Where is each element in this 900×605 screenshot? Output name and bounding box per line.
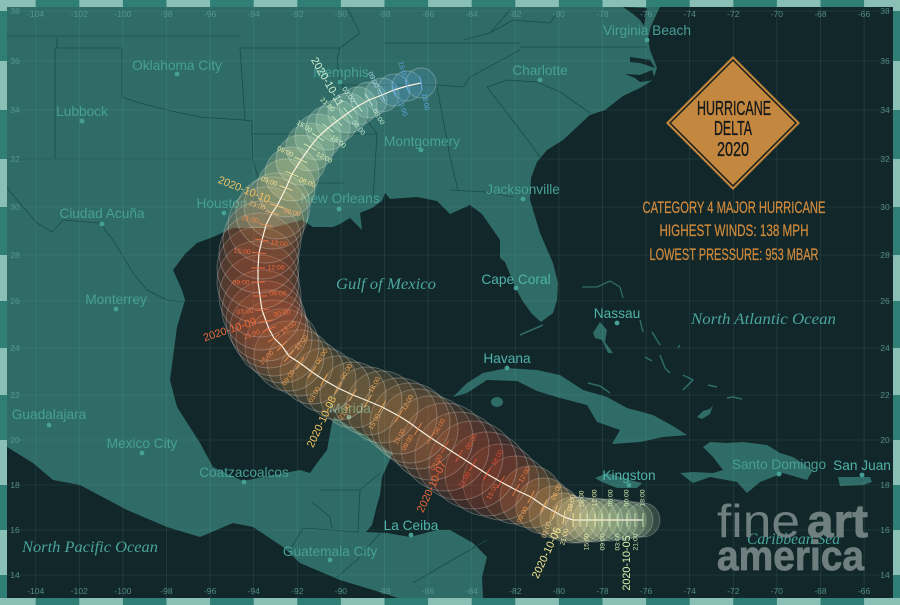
longitude labels top: -94 (248, 9, 260, 19)
longitude labels bottom: -78 (596, 586, 609, 596)
longitude labels top: -96 (204, 9, 217, 19)
ocean label: North Pacific Ocean: North Pacific Ocean (21, 539, 158, 556)
time labels along the track: 18:00 (420, 93, 430, 111)
time labels along the track: 12:00 (267, 264, 285, 272)
hurricane track line (258, 83, 643, 520)
city: Merida: Mérida (329, 401, 371, 416)
warning sign: Hurricane Delta 2020: DELTA (714, 118, 752, 140)
latitude labels right: 36 (880, 56, 890, 66)
date labels along the track (202, 55, 633, 591)
time labels along the track: 00:00 (283, 207, 301, 219)
latitude labels right: 22 (880, 390, 890, 400)
time labels along the track: 09:00 (276, 145, 294, 159)
latitude labels right: 30 (880, 202, 890, 212)
time labels along the track: 00:00 (273, 309, 291, 319)
time labels along the track: 03:00 (260, 176, 278, 188)
land: Jamaica (595, 473, 642, 488)
latitude labels left: 28 (10, 250, 20, 260)
city: Mexico City: Mexico City (107, 436, 178, 451)
longitude labels top: -90 (335, 9, 347, 19)
land: Puerto Rico (838, 477, 872, 486)
city: Kingston: Kingston (602, 468, 656, 483)
time labels along the track: 21:00 (458, 471, 472, 489)
ocean label: Caribbean Sea: Caribbean Sea (747, 531, 840, 548)
city: Memphis: Memphis (313, 65, 369, 80)
time labels along the track: 18:00 (270, 239, 288, 249)
city: Charlotte: Charlotte (512, 63, 568, 78)
longitude labels bottom: -90 (335, 586, 347, 596)
longitude labels bottom: -98 (160, 586, 173, 596)
longitude labels top: -100 (114, 9, 132, 19)
city: Santo Domingo: Santo Domingo (732, 457, 827, 472)
latitude labels left: 26 (10, 296, 20, 306)
time labels along the track: 15:00 (396, 61, 408, 79)
time labels along the track: 06:00 (608, 489, 614, 507)
land: Isle of Youth (491, 397, 503, 407)
date labels along the track: 2020-10-09 (202, 316, 258, 344)
latitude labels left: 30 (10, 202, 20, 212)
city: Oklahoma City: Oklahoma City (132, 58, 222, 73)
date labels along the track: 2020-10-11 (308, 55, 346, 109)
longitude labels top: -86 (422, 9, 435, 19)
state and national borders (7, 7, 647, 583)
time labels along the track: 12:00 (518, 466, 532, 484)
latitude labels right: 14 (880, 570, 890, 580)
time labels along the track: 00:00 (566, 494, 578, 512)
longitude labels top: -82 (509, 9, 522, 19)
city: Cape Coral: Cape Coral (481, 272, 551, 287)
time labels along the track: 15:00 (368, 413, 382, 431)
time labels along the track: 18:00 (329, 134, 347, 150)
longitude labels bottom: -104 (27, 586, 44, 596)
latitude labels left: 14 (10, 570, 20, 580)
longitude labels bottom: -74 (684, 586, 696, 596)
time labels along the track: 06:00 (433, 418, 447, 436)
longitude labels top: -80 (553, 9, 565, 19)
watermark: america (717, 532, 865, 579)
longitude labels top (27, 9, 871, 19)
time labels along the track: 06:00 (269, 290, 287, 298)
latitude labels right: 18 (880, 480, 890, 490)
latitude labels left: 20 (10, 435, 20, 445)
time labels along the track: 09:00 (281, 369, 297, 387)
time labels along the track: 00:00 (624, 489, 630, 507)
storm statistics (642, 198, 826, 264)
longitude labels top: -84 (466, 9, 478, 19)
longitude labels top: -102 (71, 9, 88, 19)
time labels along the track: 12:00 (396, 99, 408, 117)
longitude labels top: -88 (378, 9, 391, 19)
time labels along the track: 21:00 (243, 329, 261, 341)
longitude labels top: -66 (858, 9, 871, 19)
longitude labels bottom: -94 (248, 586, 260, 596)
longitude labels top: -76 (640, 9, 653, 19)
longitude labels top: -92 (291, 9, 304, 19)
latitude labels right: 16 (880, 525, 890, 535)
city: Houston: Houston (197, 196, 247, 211)
latitude labels left: 16 (10, 525, 20, 535)
date labels along the track: 2020-10-06 (530, 525, 564, 581)
longitude labels bottom: -84 (466, 586, 478, 596)
time labels along the track: 09:00 (516, 506, 530, 524)
longitude labels bottom: -102 (71, 586, 88, 596)
time labels along the track: 12:00 (401, 394, 415, 412)
bays (623, 7, 655, 82)
longitude labels bottom: -72 (727, 586, 740, 596)
longitude labels bottom: -100 (114, 586, 132, 596)
ocean label: Gulf of Mexico: Gulf of Mexico (336, 276, 436, 293)
time labels along the track: 06:00 (550, 483, 564, 501)
latitude labels left: 22 (10, 390, 20, 400)
latitude labels left (10, 6, 20, 580)
time labels along the track: 15:00 (486, 483, 500, 501)
longitude labels bottom: -80 (553, 586, 565, 596)
latitude labels right: 32 (880, 154, 890, 164)
city: Guatemala City: Guatemala City (283, 544, 377, 559)
city: Jacksonville: Jacksonville (486, 182, 560, 197)
latitude labels left: 24 (10, 343, 20, 353)
longitude labels bottom: -70 (771, 586, 783, 596)
city: Monterrey: Monterrey (85, 292, 147, 307)
watermark (717, 495, 868, 579)
3-hour tick marks (251, 76, 643, 527)
latitude labels right: 34 (880, 105, 890, 115)
latitude labels left: 38 (10, 6, 20, 16)
ocean label: North Atlantic Ocean: North Atlantic Ocean (690, 311, 836, 328)
city: Ciudad Acuna: Ciudad Acuña (59, 206, 145, 221)
date labels along the track: 2020-10-10 (216, 174, 272, 206)
longitude labels bottom: -86 (422, 586, 435, 596)
time labels along the track: 15:00 (259, 349, 276, 366)
land: Andros, Bahamas (593, 322, 613, 353)
land: Cuba (453, 368, 687, 444)
longitude labels top: -78 (596, 9, 609, 19)
time labels along the track: 18:00 (640, 489, 646, 507)
time labels along the track: 00:00 (465, 433, 479, 451)
warning sign: Hurricane Delta 2020: HURRICANE (697, 98, 771, 120)
time labels along the track: 09:00 (600, 533, 606, 551)
warning sign: Hurricane Delta 2020 (666, 56, 800, 190)
time labels along the track: 09:00 (401, 434, 415, 452)
city: San Juan: San Juan (833, 458, 891, 473)
city: La Ceiba: La Ceiba (384, 518, 439, 533)
longitude labels bottom: -66 (858, 586, 871, 596)
time labels along the track (232, 61, 646, 551)
latitude labels right: 24 (880, 343, 890, 353)
time labels along the track: 12:00 (294, 334, 310, 352)
city: Guadalajara: Guadalajara (12, 407, 87, 422)
time labels along the track: 15:00 (393, 428, 407, 446)
time labels along the track: 03:00 (340, 86, 356, 104)
time labels along the track: 15:00 (233, 248, 251, 256)
storm statistics: HIGHEST WINDS: 138 MPH (660, 221, 808, 240)
time labels along the track: 06:00 (371, 108, 385, 126)
time labels along the track: 21:00 (241, 215, 259, 225)
time labels along the track: 06:00 (314, 348, 330, 366)
time labels along the track: 06:00 (298, 177, 316, 190)
time labels along the track: 21:00 (319, 97, 336, 114)
time labels along the track: 18:00 (578, 490, 586, 508)
longitude labels bottom: -92 (291, 586, 304, 596)
latitude labels right: 20 (880, 435, 890, 445)
hurricane wind-radius circles (217, 68, 660, 543)
time labels along the track: 00:00 (350, 119, 366, 137)
longitude labels top: -70 (771, 9, 783, 19)
time labels along the track: 09:00 (232, 280, 250, 286)
warning sign: Hurricane Delta 2020: 2020 (717, 139, 749, 161)
longitude labels bottom: -68 (814, 586, 827, 596)
latitude labels right: 26 (880, 296, 890, 306)
latitude labels right (880, 6, 890, 580)
time labels along the track: 03:00 (308, 386, 322, 404)
longitude labels top: -68 (814, 9, 827, 19)
land: North and Central America (7, 7, 660, 598)
land: Hispaniola (680, 442, 813, 493)
city: Coatzacoalcos: Coatzacoalcos (199, 465, 289, 480)
time labels along the track: 12:00 (315, 151, 333, 165)
city: Virginia Beach: Virginia Beach (603, 23, 691, 38)
latitude labels right: 38 (880, 6, 890, 16)
time labels along the track: 23:00 (248, 200, 266, 212)
time labels along the track: 21:00 (632, 533, 640, 551)
time labels along the track: 21:00 (559, 528, 571, 546)
time labels along the track: 03:00 (430, 454, 444, 472)
longitude labels bottom: -76 (640, 586, 653, 596)
time labels along the track: 03:00 (614, 533, 622, 551)
time labels along the track: 00:00 (340, 363, 354, 381)
longitude labels bottom: -96 (204, 586, 217, 596)
longitude labels top: -74 (684, 9, 696, 19)
longitude labels bottom: -88 (378, 586, 391, 596)
latitude labels left: 36 (10, 56, 20, 66)
time labels along the track: 18:00 (280, 320, 298, 336)
land: small Bahamas islands (697, 405, 713, 419)
time labels along the track: 18:00 (491, 449, 505, 467)
longitude labels bottom: -82 (509, 586, 522, 596)
watermark: fine (717, 495, 800, 547)
longitude labels top: -104 (27, 9, 44, 19)
time labels along the track: 03:00 (236, 308, 254, 316)
time labels along the track: 15:00 (584, 533, 590, 551)
time labels along the track: 09:00 (366, 71, 380, 89)
longitude labels bottom (27, 586, 871, 596)
time labels along the track: 15:00 (295, 119, 313, 135)
longitude labels top: -98 (160, 9, 173, 19)
latitude labels right: 28 (880, 250, 890, 260)
latitude labels left: 18 (10, 480, 20, 490)
time labels along the track: 18:00 (368, 376, 382, 394)
date labels along the track: 2020-10-07 (415, 459, 449, 515)
date labels along the track: 2020-10-08 (305, 394, 339, 450)
time labels along the track: 21:00 (338, 403, 352, 421)
time labels along the track: 12:00 (592, 489, 598, 507)
city: Montgomery: Montgomery (384, 134, 460, 149)
watermark: art (807, 495, 868, 547)
longitude labels top: -72 (727, 9, 740, 19)
latitude labels left: 32 (10, 154, 20, 164)
city: Lubbock: Lubbock (56, 104, 108, 119)
time labels along the track: 03:00 (541, 521, 553, 539)
city: New Orleans: New Orleans (300, 191, 380, 206)
latitude labels left: 34 (10, 105, 20, 115)
city: Nassau: Nassau (594, 306, 640, 321)
city: Havana: Havana (483, 351, 531, 366)
date labels along the track: 2020-10-05 (621, 535, 633, 591)
